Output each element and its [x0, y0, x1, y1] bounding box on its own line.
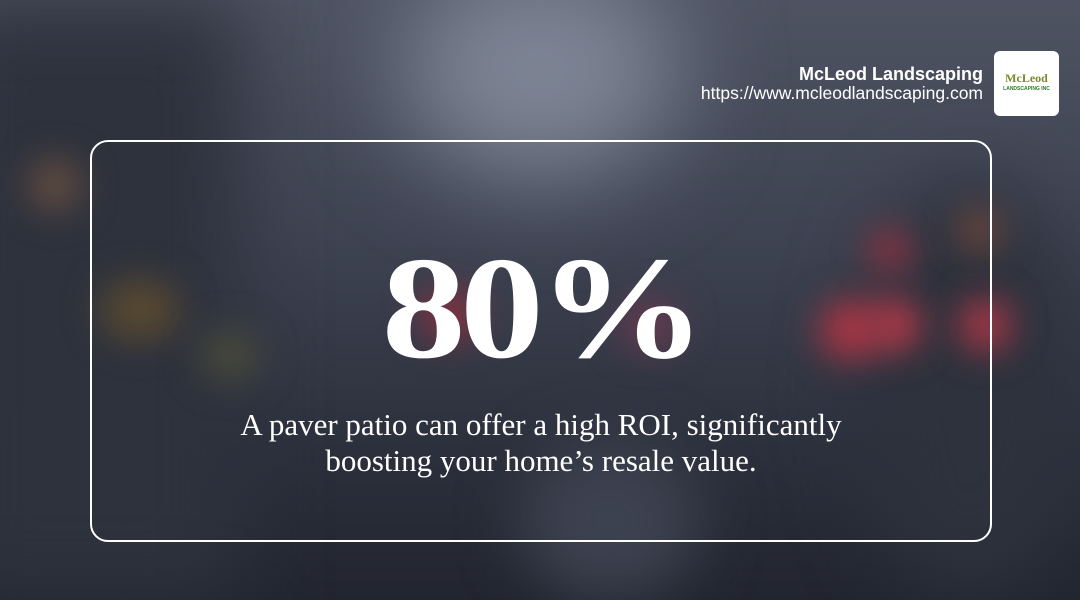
logo: [994, 51, 1059, 116]
caption: boosting your home’s resale value.: [325, 443, 757, 478]
caption: A paver patio can offer a high ROI, significantly: [240, 407, 842, 442]
panel: stat box: [90, 140, 992, 542]
brand text: McLeod Landscaping: [799, 64, 983, 84]
logo: McLeod: [1005, 71, 1048, 85]
brand text: https://www.mcleodlandscaping.com: [701, 83, 983, 103]
logo: LANDSCAPING INC: [1003, 86, 1050, 92]
caption: [240, 407, 842, 478]
brand text: [701, 64, 983, 103]
big number: 80%: [382, 227, 700, 389]
